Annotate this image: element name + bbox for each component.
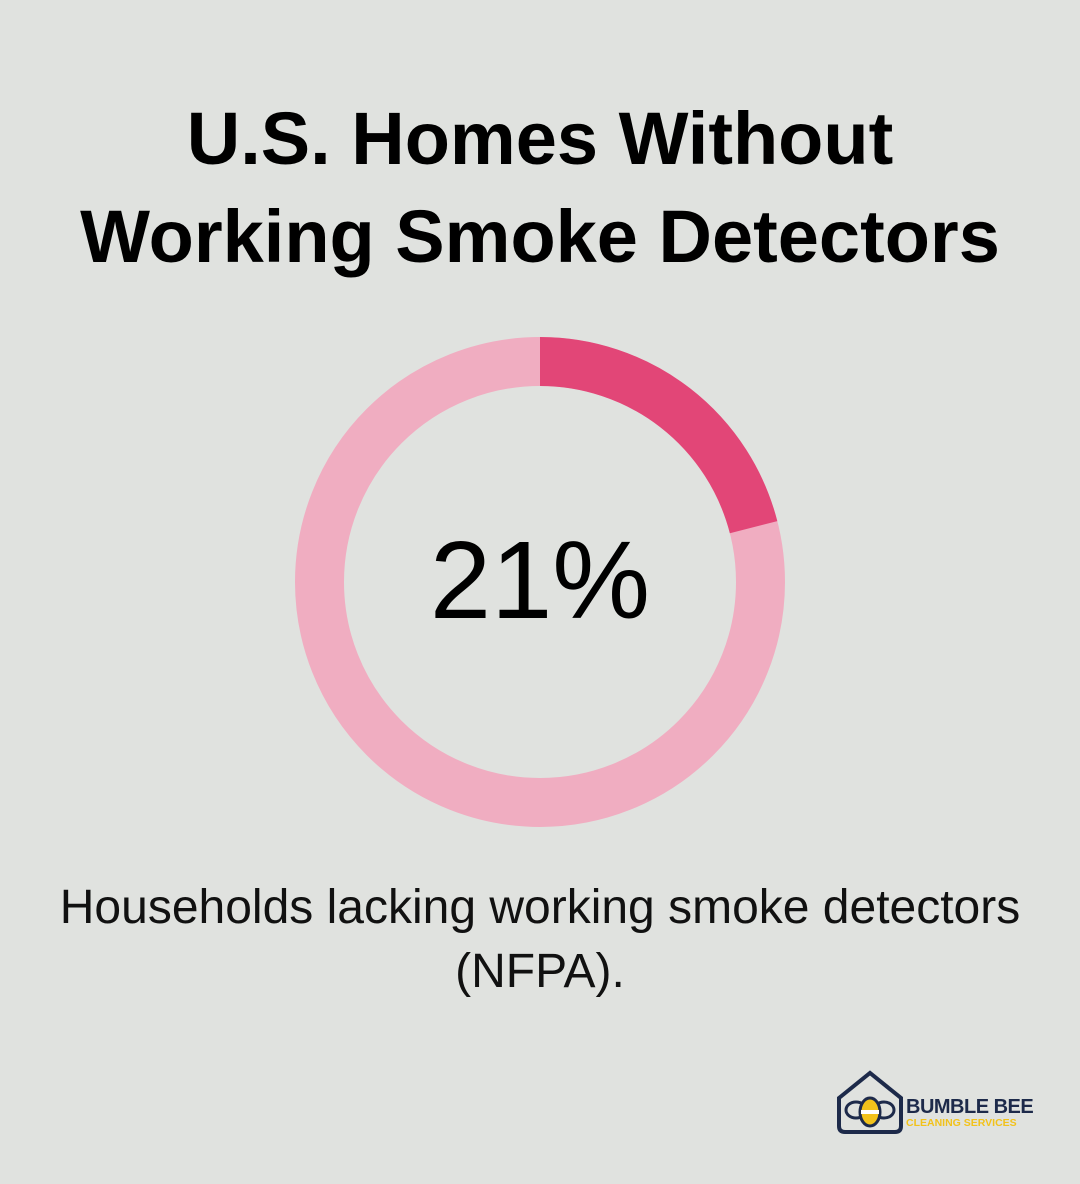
- donut chart: 21%: [430, 519, 650, 642]
- title: Working Smoke Detectors: [80, 195, 1000, 278]
- title: [80, 97, 1000, 278]
- caption: Households lacking working smoke detectors: [60, 881, 1020, 934]
- caption: (NFPA).: [455, 945, 625, 998]
- logo: BUMBLE BEE: [906, 1096, 1033, 1118]
- logo: CLEANING SERVICES: [906, 1117, 1017, 1129]
- title: U.S. Homes Without: [187, 97, 893, 180]
- caption: [60, 881, 1020, 998]
- logo: [837, 1070, 1033, 1134]
